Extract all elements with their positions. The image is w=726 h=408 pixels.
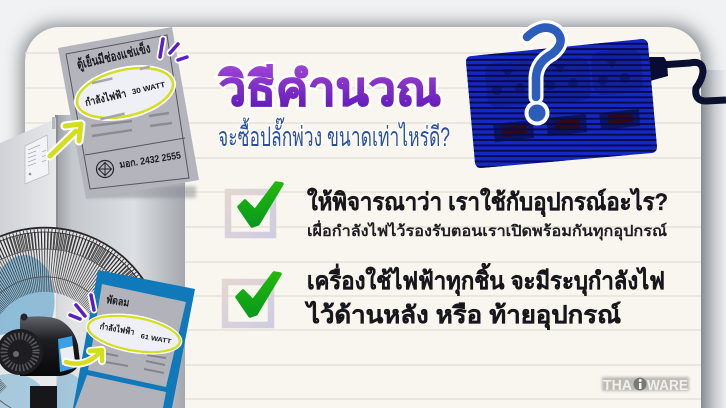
- card title: ตู้เย็นมีช่องแช่แข็ง: [75, 38, 152, 73]
- question mark: [524, 28, 561, 126]
- text: point 2 line 2: ไว้ด้านหลัง หรือ ท้ายอุปกรณ์: [304, 300, 621, 331]
- sparkle marks: [70, 295, 94, 319]
- callout ellipse: 61 WATT: [140, 333, 172, 346]
- card: refrigerator energy label: [50, 27, 199, 199]
- icon: electric fan: [0, 226, 144, 408]
- strip body: [466, 39, 657, 168]
- standard mark: [96, 150, 182, 178]
- title: วิธีคำนวณ: [218, 62, 441, 115]
- icon: power strip with question mark: [460, 28, 726, 175]
- callout ellipse: [68, 56, 182, 130]
- card: fan energy label: [66, 270, 195, 408]
- fridge door label: [25, 135, 49, 184]
- logo: THAIWARE: WARE: [647, 377, 688, 394]
- logo: THAIWARE: THA: [603, 377, 632, 394]
- callout ellipse: กำลังไฟฟ้า: [99, 321, 135, 337]
- callout ellipse: กำลังไฟฟ้า: [84, 87, 128, 109]
- spec bars: [91, 113, 172, 136]
- icon: refrigerator: [0, 115, 196, 408]
- fan cage: [0, 226, 144, 408]
- text: point 1 heading: ให้พิจารณาว่า เราใช้กับอุปกรณ์อะไร?: [307, 187, 668, 218]
- checkbox 1: [228, 183, 282, 235]
- fan blades: [0, 255, 78, 408]
- callout ellipse: [82, 307, 186, 361]
- sockets: [484, 48, 644, 108]
- subtitle: จะซื้อปลั๊กพ่วง ขนาดเท่าไหร่ดี?: [218, 117, 450, 152]
- fan motor: [0, 314, 80, 408]
- callout ellipse: 30 WATT: [131, 80, 167, 96]
- arrow: [50, 124, 81, 156]
- title: วิธีคำนวณ: [218, 62, 441, 115]
- standard mark: มอก. 2432 2555: [119, 150, 182, 171]
- spec bars: [98, 352, 166, 373]
- fan backing: [0, 229, 140, 408]
- card title: พัดลม: [106, 293, 130, 310]
- logo: THAIWARE: [602, 377, 689, 394]
- plug: [647, 57, 668, 81]
- arrow: [66, 350, 102, 364]
- text: point 2 line 1: เครื่องใช้ไฟฟ้าทุกชิ้น จะมีระบุกำลังไฟ: [307, 262, 665, 297]
- cable: [660, 62, 726, 101]
- switches: [493, 109, 640, 142]
- text: point 1 detail: เผื่อกำลังไฟไว้รองรับตอนเราเปิดพร้อมกันทุกอุปกรณ์: [307, 220, 667, 241]
- checkbox 2: [225, 273, 280, 325]
- sparkle marks: [160, 39, 187, 60]
